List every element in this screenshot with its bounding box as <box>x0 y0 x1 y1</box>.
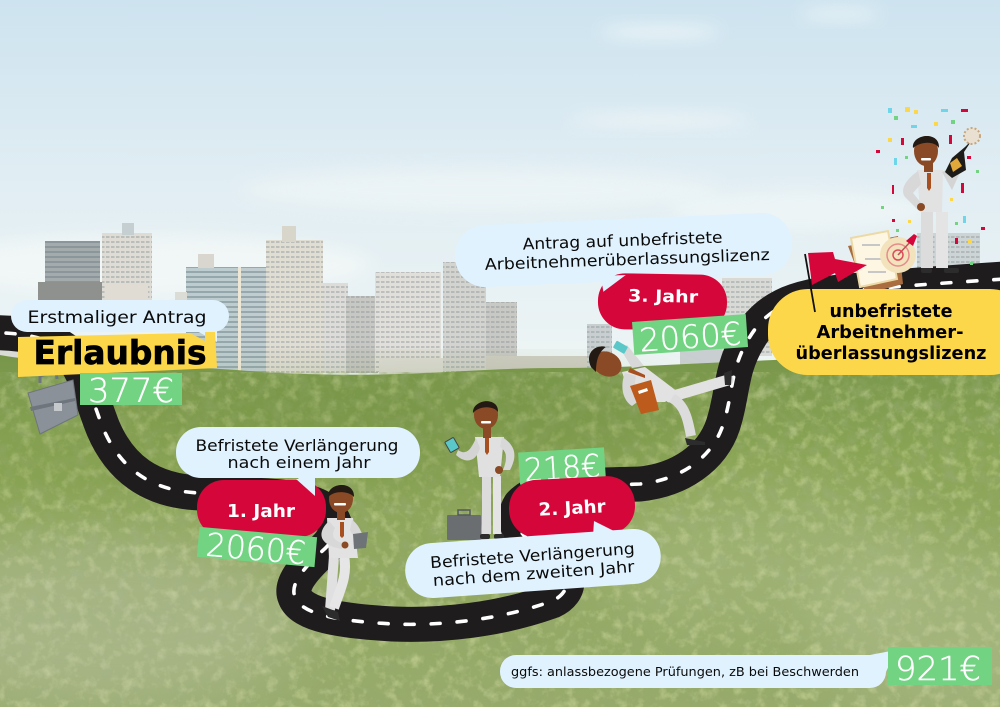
pill: 2. Jahr <box>508 475 636 539</box>
text: Antrag auf unbefristete Arbeitnehmerüberlassungslizenz: Arbeitnehmerüberlassungslizenz <box>484 245 770 274</box>
icon: red flag <box>805 252 867 312</box>
person: falling with book <box>588 341 732 445</box>
text: Antrag auf unbefristete Arbeitnehmerüberlassungslizenz: Antrag auf unbefristete <box>522 228 723 254</box>
person: with tablet <box>321 485 368 621</box>
background: sky <box>0 0 1000 380</box>
text: Befristete Verlängerung nach einem Jahr: Befristete Verlängerung <box>196 436 398 455</box>
bubble: Befristete Verlängerung nach dem zweiten Jahr: nach dem zweiten Jahr <box>432 557 636 590</box>
price: 921 euro: 921€ <box>895 649 981 688</box>
final pill: unbefristete Arbeitnehmerüberlassungslizenz: unbefristete <box>830 302 953 322</box>
final pill: unbefristete Arbeitnehmerüberlassungslizenz <box>768 289 1000 375</box>
background: forest <box>0 355 1000 707</box>
price: 2060 euro year 3: 2060€ <box>638 314 742 360</box>
icon: champagne bottle <box>945 128 980 178</box>
bubble: Befristete Verlängerung nach einem Jahr <box>176 427 420 496</box>
bubble: anlassbezogene Prüfungen: ggfs: anlassbezogene Prüfungen, zB bei Beschwerden <box>511 665 859 679</box>
bubble: Erstmaliger Antrag: Erstmaliger Antrag <box>28 308 206 328</box>
person: with phone and briefcase <box>445 401 514 540</box>
price: 2060 euro year 1: 2060€ <box>204 526 307 572</box>
background: city skyline <box>0 223 980 375</box>
bubble: anlassbezogene Prüfungen <box>500 650 896 688</box>
bubble: Befristete Verlängerung nach dem zweiten Jahr: Befristete Verlängerung <box>429 539 635 572</box>
pill: 1. Jahr: 1. Jahr <box>227 501 295 522</box>
icon: checklist and target <box>848 231 917 294</box>
label: Erlaubnis: Erlaubnis <box>34 333 206 372</box>
person: celebrating with champagne <box>903 136 962 273</box>
road <box>0 278 1000 624</box>
final pill: unbefristete Arbeitnehmerüberlassungslizenz: Arbeitnehmer- <box>816 323 964 343</box>
text: Befristete Verlängerung nach einem Jahr: nach einem Jahr <box>228 453 371 472</box>
icon: briefcase left <box>28 371 78 434</box>
pill: 2. Jahr: 2. Jahr <box>538 496 606 521</box>
pill: 3. Jahr: 3. Jahr <box>628 286 699 308</box>
final pill: unbefristete Arbeitnehmerüberlassungslizenz: überlassungslizenz <box>796 344 986 364</box>
price: 218 euro: 218€ <box>523 447 601 489</box>
pill: 3. Jahr <box>598 273 727 331</box>
text: Antrag auf unbefristete Arbeitnehmerüberlassungslizenz <box>484 226 771 296</box>
bubble: Befristete Verlängerung nach dem zweiten Jahr <box>403 521 663 600</box>
confetti <box>876 107 985 265</box>
pill: 1. Jahr <box>197 479 326 537</box>
bubble: Erstmaliger Antrag <box>11 300 229 342</box>
bubble: Antrag auf unbefristete Arbeitnehmerüberlassungslizenz <box>454 212 793 288</box>
price: 377 euro: 377€ <box>88 371 174 410</box>
